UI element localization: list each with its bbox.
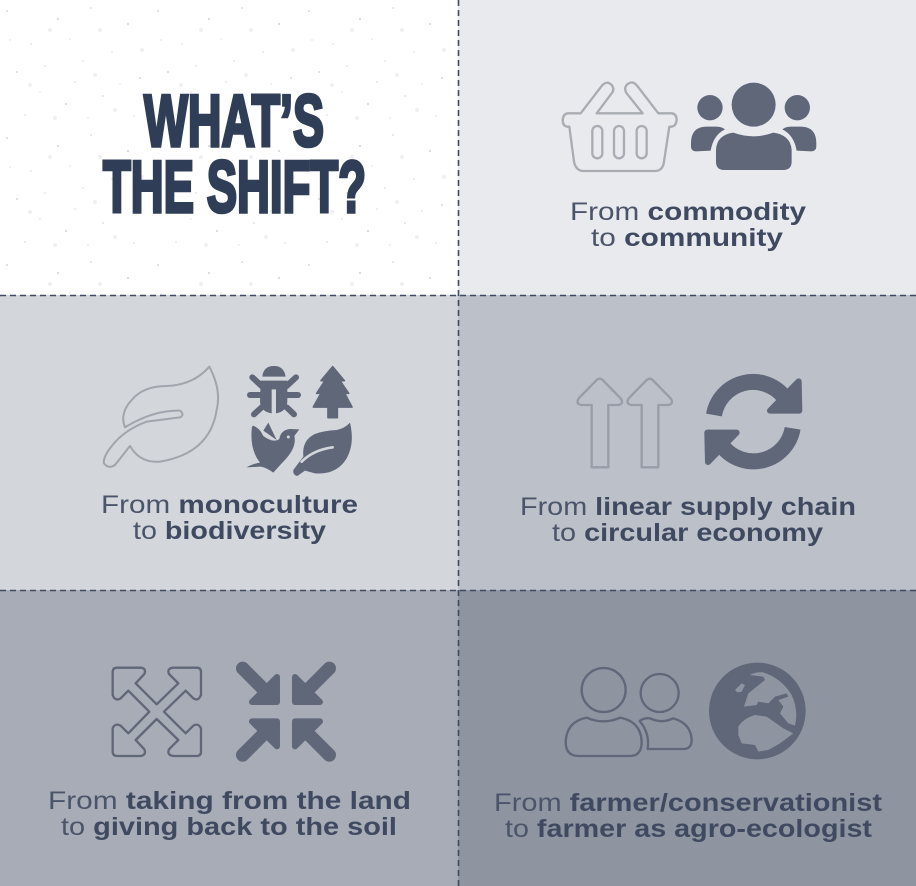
title	[103, 81, 366, 228]
panel: title background	[0, 0, 458, 295]
panel: monoculture to biodiversity background	[0, 295, 458, 590]
bug	[250, 366, 298, 414]
text: farmer to agro-ecologist: to farmer as agro-ecologist	[505, 815, 873, 843]
text: linear supply chain to circular economy: From linear supply chain	[520, 493, 856, 521]
bird	[247, 423, 299, 473]
text: taking to giving: From taking from the land	[48, 787, 411, 815]
text: farmer to agro-ecologist	[494, 789, 883, 843]
icon: expanding arrows outline	[113, 668, 201, 756]
tree	[313, 367, 352, 418]
text: commodity to community: From commodity	[570, 198, 806, 226]
icon: two people outline	[566, 668, 692, 756]
title: THE SHIFT?	[103, 147, 366, 228]
icon: shopping basket	[563, 83, 677, 171]
panel: taking to giving background	[0, 590, 458, 886]
icon: circular arrows	[707, 381, 799, 462]
title: WHAT’S	[144, 81, 324, 162]
text: monoculture to biodiversity: to biodiversity	[133, 517, 326, 545]
panel: linear supply chain to circular economy background	[458, 295, 916, 590]
icon: biodiversity bug tree bird leaf	[247, 366, 352, 476]
text: taking to giving: to giving back to the soil	[61, 813, 397, 841]
icon: community people	[691, 83, 816, 170]
text: commodity to community: to community	[591, 224, 783, 252]
text: monoculture to biodiversity	[101, 491, 358, 545]
panel: farmer to agro-ecologist background	[458, 590, 916, 886]
text: taking to giving	[48, 787, 411, 841]
text: linear supply chain to circular economy: to circular economy	[552, 519, 823, 547]
small leaf	[293, 423, 352, 476]
panel: commodity to community background	[458, 0, 916, 295]
text: commodity to community	[570, 198, 806, 252]
icon: globe	[709, 663, 806, 759]
text: monoculture to biodiversity: From monoculture	[101, 491, 358, 519]
icon: linear arrows outline	[578, 379, 672, 467]
text: farmer to agro-ecologist: From farmer/conservationist	[494, 789, 883, 817]
icon: compressing arrows	[243, 668, 329, 755]
icon: leaf outline	[104, 367, 218, 467]
text: linear supply chain to circular economy	[520, 493, 856, 547]
